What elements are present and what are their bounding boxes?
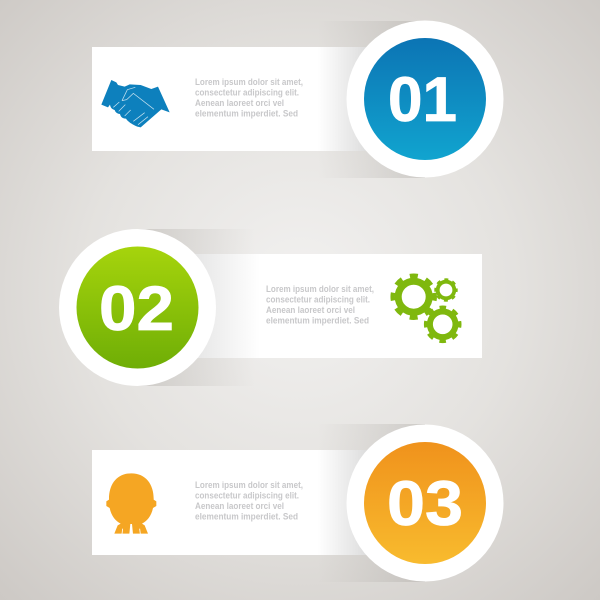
panel 3: person banner: [92, 424, 504, 582]
icon: handshake: [101, 80, 170, 127]
text block 1: consectetur adipiscing elit.: [195, 88, 299, 98]
text block 2: Aenean laoreet orci vel: [266, 305, 355, 315]
badge 01: 01: [388, 65, 457, 135]
text block 3: [195, 480, 303, 522]
banner 2 card: [190, 254, 482, 358]
shadow above and below badge 3: [318, 424, 425, 582]
badge 03: [346, 424, 504, 582]
badge 02: 02: [99, 274, 174, 344]
text block 3: Lorem ipsum dolor sit amet,: [195, 480, 303, 490]
text block 3: consectetur adipiscing elit.: [195, 490, 299, 500]
text block 1: Aenean laoreet orci vel: [195, 98, 284, 108]
shadow above and below badge 2: [137, 229, 255, 386]
badge 01: [346, 20, 504, 178]
badge 03: 03: [387, 469, 463, 539]
text block 2: elementum imperdiet. Sed: [266, 316, 369, 326]
text block 2: consectetur adipiscing elit.: [266, 294, 370, 304]
text block 2: Lorem ipsum dolor sit amet,: [266, 284, 374, 294]
text block 3: Aenean laoreet orci vel: [195, 501, 284, 511]
icon: gears: [393, 276, 460, 341]
badge 02: [59, 229, 216, 386]
panel 1: handshake banner: [92, 20, 504, 178]
text block 3: elementum imperdiet. Sed: [195, 512, 298, 522]
text block 1: Lorem ipsum dolor sit amet,: [195, 77, 303, 87]
text block 1: elementum imperdiet. Sed: [195, 108, 298, 118]
text block 2: [266, 284, 374, 326]
banner 1 card: [92, 47, 382, 151]
panel 2: gears banner: [59, 229, 482, 386]
icon: person: [106, 473, 156, 534]
text block 1: [195, 77, 303, 118]
shadow above and below badge 1: [318, 21, 425, 178]
banner 3 card: [92, 450, 382, 555]
